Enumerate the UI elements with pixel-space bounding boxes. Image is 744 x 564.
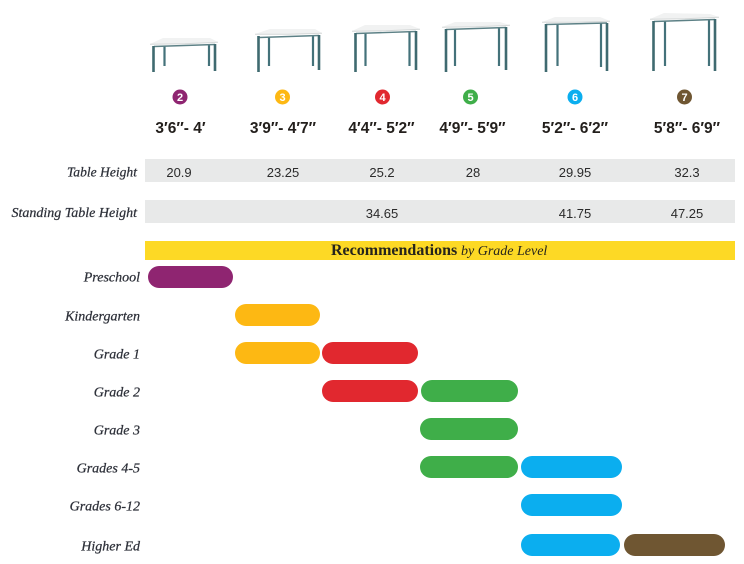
row: grades 4-5: Grades 4-5 bbox=[77, 462, 140, 476]
badge 2: 2 bbox=[177, 92, 183, 104]
row: standing table height: Standing Table Height bbox=[12, 206, 138, 221]
row: grade 2 bbox=[94, 380, 518, 402]
badge 3: 3 bbox=[279, 92, 286, 104]
row: grades 6-12 bbox=[70, 494, 622, 516]
badge 6 bbox=[568, 90, 582, 104]
recommendations heading: Recommendations bbox=[331, 242, 457, 259]
row: higher ed bbox=[80, 534, 725, 556]
student height ranges: 3′9″- 4′7″ bbox=[250, 120, 317, 137]
badge 5: 5 bbox=[467, 92, 474, 104]
icon: table size 3 bbox=[255, 29, 322, 72]
row: preschool bbox=[83, 266, 233, 288]
badge 4: 4 bbox=[379, 92, 386, 104]
badge 6: 6 bbox=[572, 92, 578, 104]
row: grades 6-12: Grades 6-12 bbox=[70, 500, 140, 514]
badge 3 bbox=[275, 90, 290, 104]
row: table height: Table Height bbox=[67, 166, 138, 180]
icon: table size 5 bbox=[442, 22, 510, 72]
badge 5 bbox=[463, 90, 478, 104]
student height ranges bbox=[155, 120, 721, 137]
icon: table size 7 bbox=[650, 13, 719, 71]
row: standing table height: 34.65 bbox=[366, 206, 398, 221]
row: higher ed: Higher Ed bbox=[80, 540, 141, 554]
row: table height: 20.9 bbox=[166, 165, 192, 180]
badge 7 bbox=[677, 90, 692, 104]
student height ranges: 3′6″- 4′ bbox=[155, 120, 206, 137]
row: grade 3 bbox=[94, 418, 518, 440]
row: table height: 25.2 bbox=[369, 165, 395, 180]
row: standing table height bbox=[12, 200, 735, 223]
badge 2 bbox=[172, 90, 188, 104]
row: grade 1 bbox=[94, 342, 418, 364]
icon: table size 6 bbox=[542, 17, 610, 72]
icon: table size 4 bbox=[352, 25, 420, 72]
grade recommendation chart bbox=[64, 266, 725, 556]
icon: table size 2 bbox=[150, 38, 218, 72]
recommendations heading bbox=[145, 241, 735, 260]
row: table height: 32.3 bbox=[674, 165, 700, 180]
recommendations heading: by Grade Level bbox=[461, 244, 547, 259]
badge 7: 7 bbox=[681, 92, 688, 104]
row: standing table height: 41.75 bbox=[559, 206, 591, 221]
student height ranges: 4′9″- 5′9″ bbox=[439, 120, 506, 137]
row: table height bbox=[67, 159, 735, 182]
row: kindergarten bbox=[64, 304, 320, 326]
table illustrations bbox=[150, 13, 719, 72]
row: grades 4-5 bbox=[77, 456, 622, 478]
row: preschool: Preschool bbox=[83, 270, 140, 286]
row: table height: 28 bbox=[466, 165, 480, 180]
row: kindergarten: Kindergarten bbox=[64, 310, 140, 324]
student height ranges: 5′2″- 6′2″ bbox=[542, 120, 609, 137]
row: standing table height: 47.25 bbox=[671, 206, 703, 221]
row: grade 1: Grade 1 bbox=[94, 348, 140, 362]
size number badges bbox=[172, 90, 692, 104]
student height ranges: 4′4″- 5′2″ bbox=[348, 120, 415, 137]
row: table height: 23.25 bbox=[267, 165, 299, 180]
row: grade 3: Grade 3 bbox=[94, 424, 140, 438]
row: grade 2: Grade 2 bbox=[94, 386, 140, 400]
badge 4 bbox=[375, 90, 390, 104]
row: table height: 29.95 bbox=[559, 165, 591, 180]
student height ranges: 5′8″- 6′9″ bbox=[654, 120, 721, 137]
